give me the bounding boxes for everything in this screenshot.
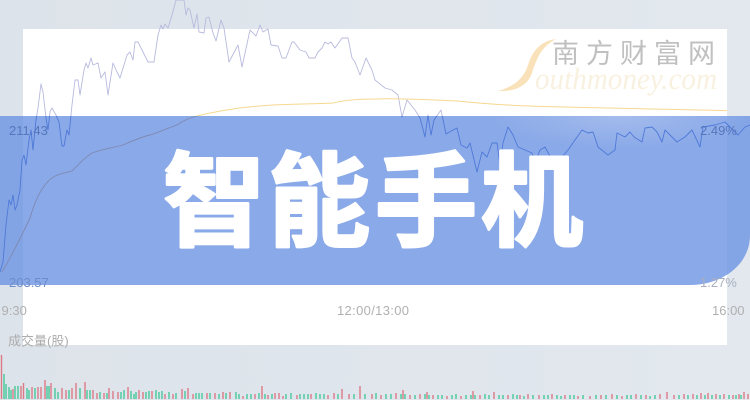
red volume bars	[2, 355, 748, 399]
axis label: midday time: 12:00/13:00	[337, 303, 409, 318]
chart: price line in band	[0, 116, 750, 272]
panel: blue title band	[0, 116, 750, 285]
axis label: end time: 16:00	[712, 303, 745, 318]
axis label: volume: 成交量(股)	[8, 334, 69, 348]
panel: white chart area	[23, 29, 727, 345]
chart: average line in band	[2, 116, 198, 272]
logo: Chinese name: 南方财富网	[552, 32, 722, 71]
watermark: southmoney logo	[498, 32, 722, 96]
axis label: start time: 9:30	[2, 303, 27, 318]
icon: S swoosh	[498, 39, 556, 91]
axis label: top percent: 2.49%	[700, 123, 737, 138]
chart: average line above band	[196, 98, 727, 116]
axis label: bottom price: 203.57	[9, 275, 49, 290]
chart: price line above band	[36, 0, 443, 116]
title: 智能手机	[163, 121, 583, 268]
logo: domain name: outhmoney.com	[535, 61, 717, 96]
axis label: top price: 211.43	[9, 123, 48, 138]
green volume bars	[4, 374, 741, 399]
axis label: bottom percent: 1.27%	[700, 275, 737, 290]
chart: volume bars	[2, 355, 748, 399]
